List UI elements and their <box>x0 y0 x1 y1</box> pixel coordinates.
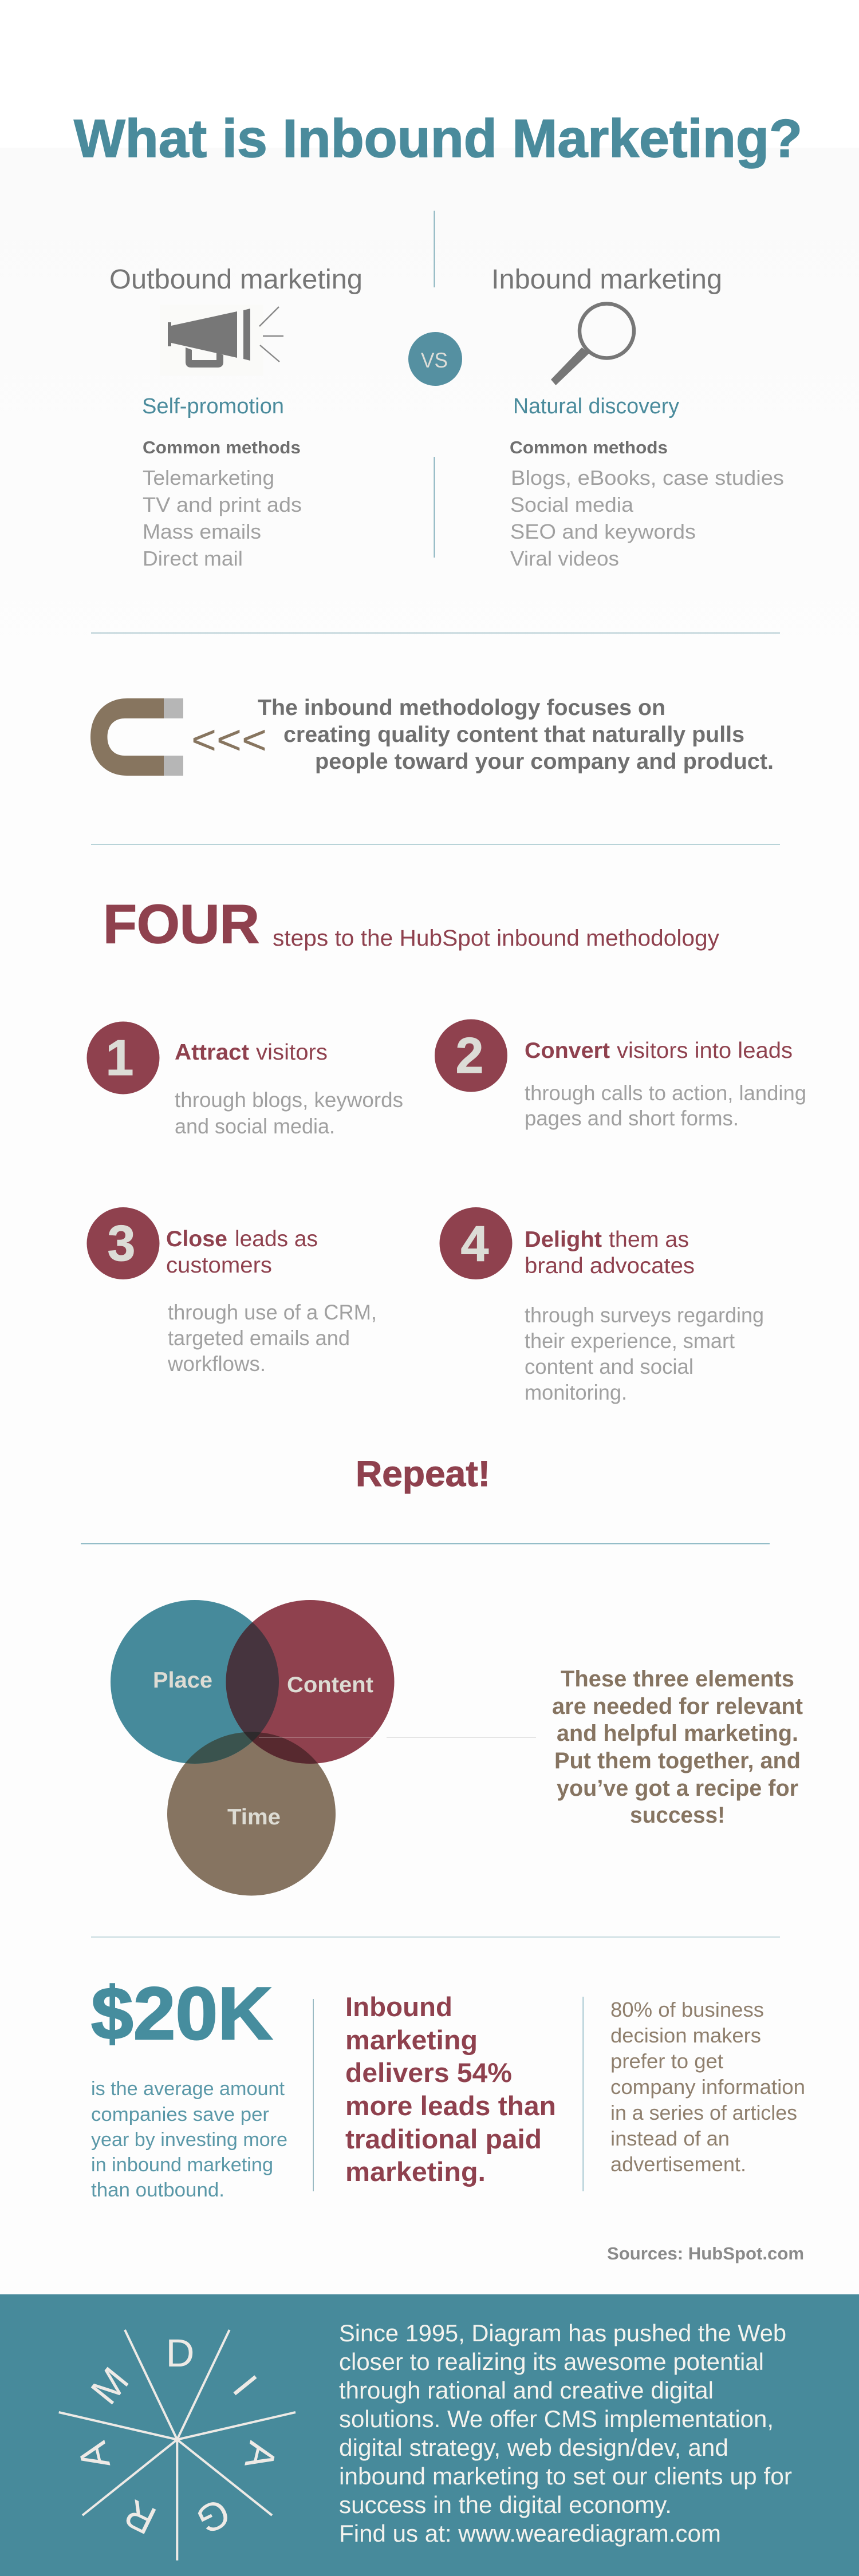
stat: 54% more leads: more leads than <box>345 2091 556 2121</box>
label: natural discovery: Natural discovery <box>513 394 679 418</box>
icon: diagram logo: R <box>117 2491 163 2543</box>
text: about diagram: Find us at: www.wearediagram.com <box>339 2520 721 2547</box>
text: methodology statement <box>258 696 774 774</box>
chart: venn diagram <box>111 1600 536 1896</box>
heading: four steps: steps to the HubSpot inbound methodology <box>273 926 719 951</box>
text: about diagram: inbound marketing to set our clients up for <box>339 2463 792 2490</box>
panel: outbound vs inbound comparison <box>109 211 784 570</box>
icon: vs badge <box>408 332 462 386</box>
step 3: close: 3 <box>108 1215 135 1271</box>
stat: 80% of decision makers <box>610 1998 805 2176</box>
inbound methods list: Common methods <box>510 437 668 457</box>
panel: methodology statement <box>90 696 774 776</box>
outbound methods list: TV and print ads <box>143 493 302 516</box>
text: methodology statement: creating quality content that naturally pulls <box>283 722 744 747</box>
inbound methods list: Blogs, eBooks, case studies <box>511 466 784 489</box>
step 1: attract: Attract <box>175 1040 249 1065</box>
icon: diagram logo: I <box>224 2367 266 2404</box>
arrows: pull chevrons: <<< <box>191 717 267 763</box>
text: methodology statement: The inbound methodology focuses on <box>258 696 665 720</box>
step 1: attract: and social media. <box>175 1115 335 1138</box>
icon: diagram logo: G <box>190 2490 237 2543</box>
step 4: delight: brand advocates <box>525 1254 695 1278</box>
stat: 80% of decision makers: decision makers <box>610 2024 761 2047</box>
callout: three elements <box>552 1666 803 1828</box>
stat: 54% more leads: delivers 54% <box>345 2057 512 2088</box>
heading: repeat: Repeat! <box>356 1454 490 1494</box>
callout: three elements: you’ve got a recipe for <box>557 1776 798 1801</box>
text: about diagram: through rational and creative digital <box>339 2377 714 2404</box>
stat: $20K: $20K <box>91 1971 273 2055</box>
stat: $20K: companies save per <box>91 2104 269 2125</box>
step 3: close <box>87 1207 377 1376</box>
icon: diagram logo: A <box>70 2438 119 2474</box>
step 4: delight: monitoring. <box>525 1381 627 1404</box>
step 3: close: targeted emails and <box>168 1326 350 1350</box>
text: about diagram: Since 1995, Diagram has pushed the Web <box>339 2320 786 2346</box>
inbound methods list <box>510 437 784 570</box>
step 2: convert: visitors into leads <box>617 1038 793 1063</box>
heading: inbound marketing: Inbound marketing <box>491 264 722 295</box>
step 2: convert: Convert <box>525 1038 610 1063</box>
step 2: convert: 2 <box>456 1027 483 1084</box>
stat: 80% of decision makers: instead of an <box>610 2127 730 2150</box>
heading: four steps: FOUR <box>103 894 259 955</box>
stat: 54% more leads: Inbound <box>345 1992 452 2022</box>
step 4: delight: them as <box>609 1227 689 1252</box>
stat: $20K: is the average amount <box>91 2078 285 2100</box>
heading: outbound marketing: Outbound marketing <box>109 264 362 295</box>
label: self-promotion: Self-promotion <box>142 394 284 418</box>
icon: megaphone <box>160 305 283 376</box>
inbound methods list: Social media <box>510 493 634 516</box>
stat: 54% more leads: marketing <box>345 2025 478 2055</box>
title: What is Inbound Marketing? <box>74 108 802 168</box>
panel: footer <box>0 2294 859 2576</box>
icon: vs badge: VS <box>421 349 448 372</box>
icon: diagram logo: A <box>237 2438 285 2474</box>
stat: $20K <box>91 1971 287 2201</box>
step 3: close: workflows. <box>167 1352 266 1376</box>
stat: $20K: year by investing more <box>91 2129 287 2151</box>
inbound methods list: Viral videos <box>510 547 619 570</box>
step 4: delight: 4 <box>461 1215 489 1272</box>
icon: diagram logo: D <box>166 2331 195 2375</box>
stat: 80% of decision makers: 80% of business <box>610 1998 764 2021</box>
step 3: close: Close <box>166 1227 227 1251</box>
text: about diagram: success in the digital economy. <box>339 2491 672 2518</box>
callout: three elements: are needed for relevant <box>552 1694 803 1719</box>
step 4: delight <box>440 1207 764 1404</box>
stat: 54% more leads <box>345 1992 556 2187</box>
text: about diagram: solutions. We offer CMS implementation, <box>339 2405 774 2432</box>
callout: three elements: and helpful marketing. <box>557 1721 798 1746</box>
callout: three elements: Put them together, and <box>554 1748 801 1773</box>
inbound methods list: SEO and keywords <box>510 520 696 543</box>
icon: magnifying glass <box>551 303 634 385</box>
text: methodology statement: people toward your company and product. <box>315 749 774 774</box>
step 1: attract: visitors <box>256 1040 328 1065</box>
outbound methods list: Mass emails <box>143 520 261 543</box>
step 4: delight: content and social <box>525 1355 693 1378</box>
step 1: attract <box>87 1021 403 1138</box>
outbound methods list <box>143 437 302 570</box>
callout: three elements: These three elements <box>561 1666 794 1692</box>
stat: $20K: in inbound marketing <box>91 2154 273 2176</box>
step 3: close: customers <box>166 1253 272 1278</box>
icon: diagram logo <box>59 2330 295 2561</box>
step 2: convert <box>435 1019 806 1130</box>
text: about diagram: closer to realizing its awesome potential <box>339 2348 764 2375</box>
stat: 80% of decision makers: in a series of articles <box>610 2101 797 2124</box>
step 2: convert: pages and short forms. <box>525 1107 739 1130</box>
step 3: close: leads as <box>235 1227 318 1251</box>
text: about diagram <box>339 2320 792 2547</box>
outbound methods list: Direct mail <box>143 547 243 570</box>
icon: diagram logo: M <box>82 2359 137 2412</box>
outbound methods list: Telemarketing <box>143 466 274 489</box>
step 2: convert: through calls to action, landing <box>525 1081 806 1105</box>
stat: 80% of decision makers: prefer to get <box>610 2049 723 2073</box>
stat: 54% more leads: marketing. <box>345 2156 486 2187</box>
stat: 80% of decision makers: company information <box>610 2075 805 2099</box>
step 1: attract: 1 <box>106 1029 133 1086</box>
stat: 54% more leads: traditional paid <box>345 2124 542 2154</box>
sources: Sources: HubSpot.com <box>607 2243 804 2263</box>
label: time: Time <box>227 1805 281 1830</box>
step 1: attract: through blogs, keywords <box>175 1088 403 1112</box>
outbound methods list: Common methods <box>143 437 301 457</box>
stat: $20K: than outbound. <box>91 2179 224 2201</box>
step 4: delight: their experience, smart <box>525 1329 735 1353</box>
callout: three elements: success! <box>630 1803 725 1828</box>
icon: magnet <box>90 698 183 776</box>
label: place: Place <box>153 1668 212 1693</box>
stat: 80% of decision makers: advertisement. <box>610 2152 746 2176</box>
heading: four steps <box>103 894 719 955</box>
step 4: delight: through surveys regarding <box>525 1303 764 1327</box>
label: content: Content <box>287 1673 373 1697</box>
step 3: close: through use of a CRM, <box>168 1301 377 1324</box>
step 4: delight: Delight <box>525 1227 602 1252</box>
text: about diagram: digital strategy, web design/dev, and <box>339 2434 728 2461</box>
